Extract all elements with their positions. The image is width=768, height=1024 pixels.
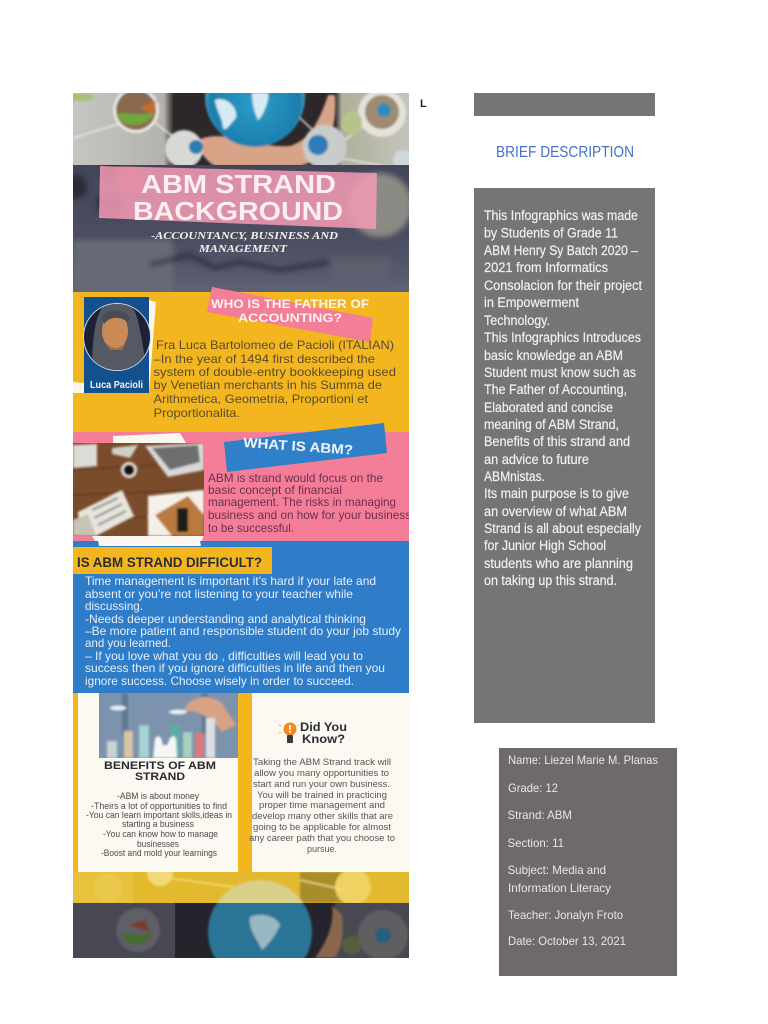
body text: proper time management and — [259, 800, 385, 810]
body text: ABM is strand would focus on the — [208, 471, 383, 485]
heading: brief description: BRIEF DESCRIPTION — [496, 144, 634, 161]
title ribbon — [99, 166, 377, 229]
panel: description: Technology. — [484, 313, 550, 328]
benefit list: starting a business — [122, 819, 195, 829]
body text: going to be applicable for almost — [253, 822, 391, 832]
panel: student details: Section: 11 — [508, 836, 564, 850]
panel: description: ABM Henry Sy Batch 2020 – — [484, 243, 638, 258]
body text: allow you many opportunities to — [254, 768, 389, 778]
panel: description: 2021 from Informatics — [484, 260, 608, 275]
benefit list: -You can learn important skills,ideas in — [86, 810, 232, 820]
panel: description: This Infographics was made — [484, 208, 638, 223]
heading: BENEFITS OF ABM — [104, 760, 216, 772]
panel: description: The Father of Accounting, — [484, 382, 627, 397]
top grey bar — [474, 93, 655, 116]
panel: description: on taking up this strand. — [484, 573, 617, 588]
paper edge — [98, 541, 201, 546]
portrait: Luca Pacioli: Luca Pacioli — [90, 380, 143, 391]
body text — [154, 338, 396, 420]
subtitle: MANAGEMENT — [198, 244, 288, 255]
benefit list: -Theirs a lot of opportunities to find — [91, 801, 227, 811]
panel: description: Consolacion for their project — [484, 278, 642, 293]
panel: student details — [499, 748, 677, 976]
body text: -Needs deeper understanding and analytical thinking — [85, 612, 366, 626]
heading — [104, 762, 216, 780]
panel: student details: Grade: 12 — [508, 781, 558, 795]
panel: description: meaning of ABM Strand, — [484, 417, 619, 432]
panel: description: Elaborated and concise — [484, 400, 613, 415]
panel: is ABM strand difficult — [73, 541, 409, 694]
heading ribbon — [207, 287, 373, 342]
body text: any career path that you choose to — [249, 833, 395, 843]
heading: Know? — [302, 732, 345, 746]
panel: description — [474, 188, 655, 723]
body text: and you learned. — [85, 636, 171, 650]
title — [134, 174, 342, 220]
panel: description: students who are planning — [484, 556, 633, 571]
footer: globe photo with yellow and dark tint — [73, 872, 409, 958]
body text — [85, 574, 401, 688]
panel: description: ABMnistas. — [484, 469, 545, 484]
panel: who is the father of accounting — [73, 287, 409, 432]
panel: description: in Empowerment — [484, 295, 579, 310]
heading: STRAND — [135, 771, 185, 783]
body text: Taking the ABM Strand track will — [253, 757, 391, 767]
body text: success then if you ignore difficulties in life and then you — [85, 661, 385, 675]
letter L: L — [420, 98, 427, 110]
body text — [249, 757, 395, 854]
panel: student details: Strand: ABM — [508, 808, 572, 822]
subtitle: -ACCOUNTANCY, BUSINESS AND — [151, 231, 338, 242]
body text: absent or you’re not listening to your teacher while — [85, 587, 353, 601]
photo: office desk — [73, 443, 204, 536]
body text: to be successful. — [208, 521, 294, 535]
body text: –Be more patient and responsible student do your job study — [85, 624, 401, 638]
heading: WHAT IS ABM? — [243, 435, 354, 458]
body text: You will be trained in practicing — [257, 790, 387, 800]
body text: basic concept of financial — [208, 483, 342, 497]
panel: description: basic knowledge an ABM — [484, 348, 623, 363]
body text: discussing. — [85, 599, 143, 613]
panel: benefits of ABM strand — [73, 693, 409, 872]
panel: student details: Name: Liezel Marie M. Planas — [508, 753, 658, 767]
body text: business and on how for your business — [208, 508, 411, 522]
hero photo: globe and hand — [73, 93, 409, 165]
heading: ACCOUNTING? — [238, 311, 342, 325]
panel: description: Benefits of this strand and — [484, 434, 630, 449]
heading ribbon — [224, 423, 387, 472]
panel: description: Strand is all about especially — [484, 521, 641, 536]
body text: Fra Luca Bartolomeo de Pacioli (ITALIAN) — [156, 338, 394, 352]
panel: description: Student must know such as — [484, 365, 636, 380]
body text: management. The risks in managing — [208, 495, 396, 509]
body text — [208, 471, 411, 535]
portrait: Luca Pacioli — [83, 297, 151, 393]
body text: system of double-entry bookkeeping used — [154, 365, 396, 379]
white paper behind photo — [92, 433, 204, 546]
body text: –In the year of 1494 first described the — [154, 352, 375, 366]
benefit list: -You can know how to manage — [103, 829, 218, 839]
subtitle — [151, 232, 338, 252]
body text: – If you love what you do , difficulties will lead you to — [85, 649, 363, 663]
panel: description: for Junior High School — [484, 538, 606, 553]
body text: Proportionalita. — [154, 406, 240, 420]
panel: student details: Date: October 13, 2021 — [508, 934, 626, 948]
body text: Arithmetica, Geometria, Proportioni et — [154, 392, 369, 406]
panel: description: This Infographics Introduces — [484, 330, 641, 345]
panel: description: an advice to future — [484, 452, 589, 467]
panel: student details: Subject: Media and — [508, 863, 606, 877]
body text: ignore success. Choose wisely in order to succeed. — [85, 674, 354, 688]
portrait backing paper — [73, 300, 156, 393]
photo: miniature city and handshake — [99, 693, 238, 758]
heading — [211, 300, 369, 322]
panel: student details: Information Literacy — [508, 881, 611, 895]
heading bar — [73, 547, 272, 574]
heading: IS ABM STRAND DIFFICULT? — [77, 555, 262, 570]
panel: what is ABM — [73, 423, 411, 546]
icon: light bulb — [279, 722, 299, 743]
heading: WHO IS THE FATHER OF — [211, 297, 369, 311]
body text: by Venetian merchants in his Summa de — [154, 378, 382, 392]
title: ABM STRAND — [141, 171, 336, 199]
title: BACKGROUND — [133, 198, 343, 226]
heading: Did You — [300, 720, 347, 734]
body text: develop many other skills that are — [252, 811, 393, 821]
panel: description: by Students of Grade 11 — [484, 226, 618, 240]
body text: Time management is important it’s hard if your late and — [85, 574, 376, 588]
header: dark background photo — [63, 161, 412, 293]
panel: infographic — [73, 93, 409, 958]
body text: start and run your own business. — [253, 779, 390, 789]
benefit list: businesses — [137, 839, 180, 849]
body text: pursue. — [307, 844, 337, 854]
panel: description: Its main purpose is to give — [484, 486, 629, 501]
heading — [300, 722, 346, 743]
benefit list — [86, 791, 232, 858]
panel: description: an overview of what ABM — [484, 504, 627, 519]
panel: student details: Teacher: Jonalyn Froto — [508, 908, 623, 922]
panel: did you know — [249, 720, 395, 854]
benefit list: -Boost and mold your learnings — [101, 848, 218, 858]
benefit list: -ABM is about money — [117, 791, 200, 801]
